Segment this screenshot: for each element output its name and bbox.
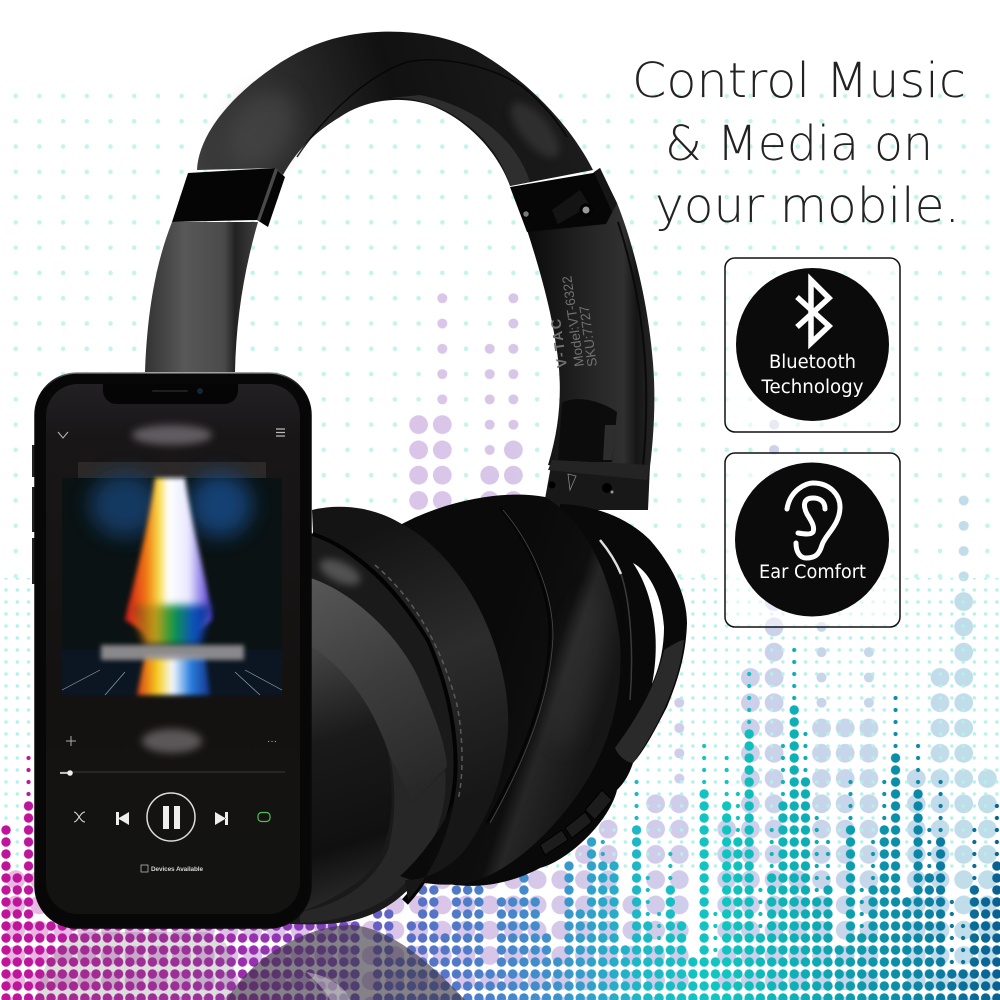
title: Control Music xyxy=(632,53,966,109)
blurred track header xyxy=(132,425,212,445)
phone notch xyxy=(103,384,238,404)
repeat icon xyxy=(258,812,270,822)
previous icon xyxy=(116,812,129,825)
phone screen xyxy=(46,384,300,914)
progress slider xyxy=(60,770,285,776)
floor xyxy=(62,650,282,695)
gloss streak xyxy=(600,540,621,574)
cyan sparse dot grid xyxy=(0,84,1000,578)
icon: bluetooth xyxy=(797,280,829,343)
phone xyxy=(32,373,311,928)
album art xyxy=(62,473,282,695)
plus icon xyxy=(66,736,76,746)
left glossy collar xyxy=(172,168,285,227)
cushion underside xyxy=(390,95,530,186)
right cup shell and yoke loop xyxy=(420,504,687,886)
prism beam xyxy=(125,478,212,635)
badge: Bluetooth Technology: Bluetooth xyxy=(769,352,856,373)
left cup grey strap xyxy=(300,575,447,802)
devices label: Devices Available xyxy=(151,866,203,873)
chrome ring xyxy=(313,532,458,902)
phone body xyxy=(35,373,311,928)
cyan dense dot grid xyxy=(0,578,1000,868)
control buttons xyxy=(540,790,612,855)
speaker and camera xyxy=(152,388,203,394)
arm printed model text: Model:VT-6322 xyxy=(559,275,587,368)
shuffle icon xyxy=(74,812,85,822)
left headband slider xyxy=(145,222,258,372)
badge: Ear Comfort xyxy=(725,453,900,627)
pad sheen xyxy=(542,588,614,752)
reflection under phone and headphones xyxy=(36,925,465,1000)
ear pad front xyxy=(400,495,621,885)
yoke lower strap xyxy=(615,640,684,763)
pad seam xyxy=(487,508,550,823)
hinge xyxy=(543,399,650,510)
next icon xyxy=(215,812,228,825)
left cup shell xyxy=(290,530,456,924)
sky glow xyxy=(188,473,252,537)
play pause button xyxy=(147,793,195,841)
title: your mobile. xyxy=(655,178,960,234)
badge: Bluetooth Technology: Technology xyxy=(761,377,864,398)
left cup inner disc xyxy=(300,640,392,912)
collar highlight xyxy=(257,168,278,221)
right glossy collar xyxy=(510,168,617,232)
headband cushion xyxy=(197,32,593,186)
yoke opening xyxy=(633,563,664,684)
headphones xyxy=(145,32,687,924)
screw xyxy=(581,205,591,215)
sky glow xyxy=(90,473,160,537)
left cup lower shell xyxy=(300,757,446,923)
prism floor reflection xyxy=(137,655,210,695)
right headband arm xyxy=(527,203,654,482)
arm printed model text: SKU:7727 xyxy=(577,305,600,368)
phone side buttons xyxy=(32,445,36,584)
equalizer bars: magenta to teal gradient dots xyxy=(1,648,1000,1000)
blurred title bar xyxy=(101,645,244,660)
badge: Bluetooth Technology xyxy=(725,258,900,432)
grey bar above album art xyxy=(78,462,266,478)
more icon: ··· xyxy=(267,736,277,747)
queue icon xyxy=(276,429,285,436)
badge: Ear Comfort: Ear Comfort xyxy=(759,562,866,583)
gloss line xyxy=(621,574,632,700)
arm printed model text xyxy=(547,275,600,369)
rear pad stitch xyxy=(375,565,462,800)
cushion seam xyxy=(297,60,567,157)
icon: ear xyxy=(787,483,840,558)
arm edge shadow xyxy=(618,222,646,475)
chevron icon xyxy=(58,432,68,438)
screw xyxy=(522,210,530,218)
pad seam light xyxy=(490,510,553,823)
strap highlight xyxy=(316,554,364,590)
lavender equalizer dots xyxy=(6,293,997,1000)
floor lines xyxy=(62,670,282,695)
blurred artist name xyxy=(142,729,202,753)
title xyxy=(632,53,966,234)
ear pad rear xyxy=(312,507,508,900)
prism lower colours xyxy=(130,605,212,645)
cushion highlight xyxy=(213,78,311,182)
cushion highlight right xyxy=(502,95,568,165)
title: & Media on xyxy=(665,116,933,172)
arm printed model text: V-TAC xyxy=(547,316,570,369)
